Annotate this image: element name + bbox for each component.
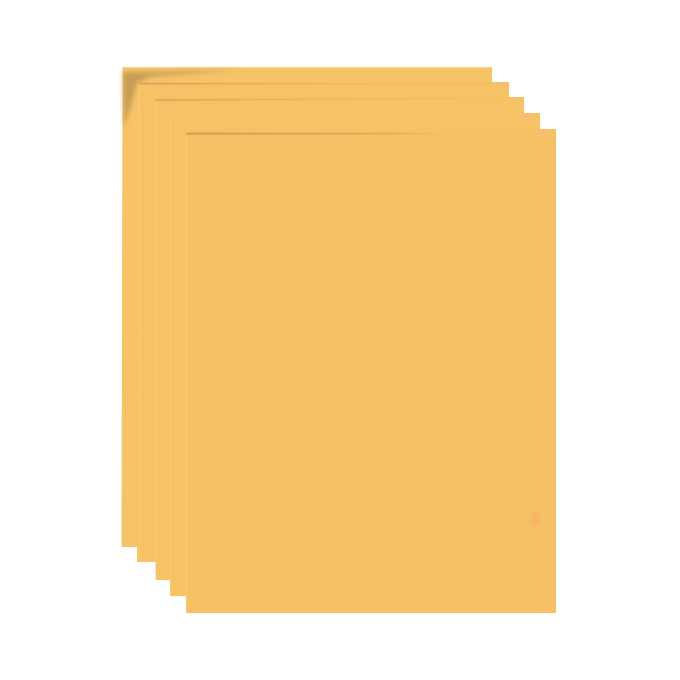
sheet 3 [155, 97, 524, 580]
faint orange mark near the lower right [530, 513, 539, 525]
sheet 4 [170, 113, 540, 596]
sheet 1 (back) [122, 67, 492, 547]
crease line along the top edge [186, 133, 448, 134]
foil reflection in the top-left corner [123, 70, 240, 128]
sheet 5 (front) [186, 129, 556, 613]
sheet 2 [137, 82, 509, 562]
